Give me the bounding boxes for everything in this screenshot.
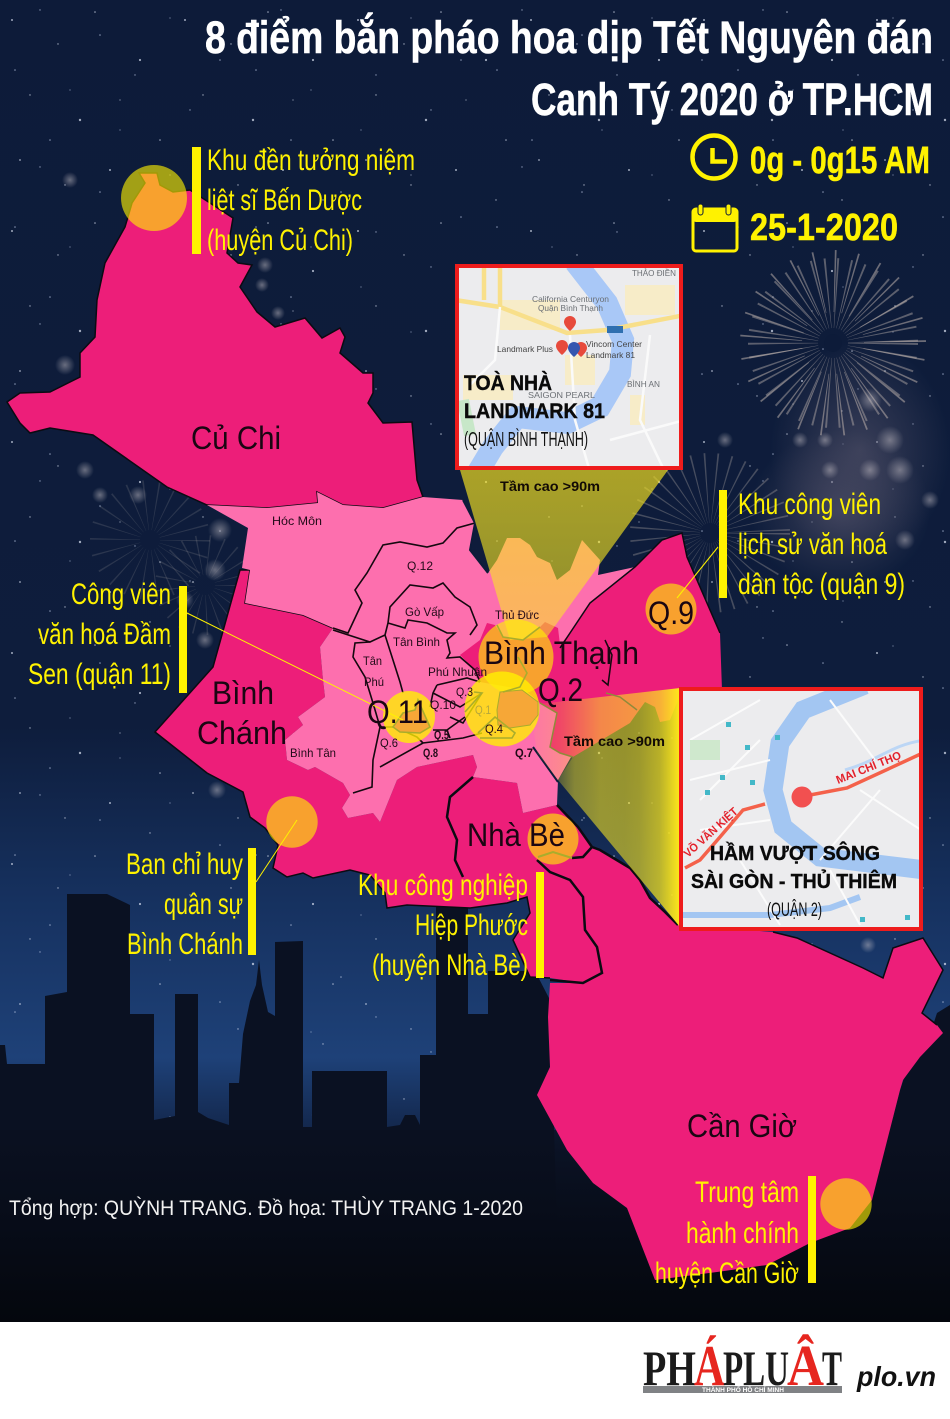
time and date xyxy=(692,136,930,251)
map labels: small: Q.10 xyxy=(430,698,456,712)
panel: Landmark 81 map: THẢO ĐIỀN xyxy=(632,267,676,278)
panel: Landmark 81 map: California Centuryon xyxy=(532,294,609,304)
districts: Bình Thạnh, Q.2 and Q.9 xyxy=(460,533,722,757)
map labels: small: Q.7 xyxy=(515,746,533,760)
panel: Landmark 81 map: BÌNH AN xyxy=(627,379,660,389)
icon: clock xyxy=(692,136,736,178)
map labels: small: Thủ Đức xyxy=(495,608,539,622)
inner districts: light pink area xyxy=(207,492,635,822)
callout: Cần Giờ: hành chính xyxy=(686,1217,799,1250)
city skyline silhouette xyxy=(0,894,950,1322)
map labels: small: Q.12 xyxy=(407,559,433,573)
logo: Pháp Luật: THÀNH PHỐ HỒ CHÍ MINH xyxy=(702,1386,784,1394)
callout: Hiệp Phước: Khu công nghiệp xyxy=(358,869,528,902)
map labels: small: Tân Bình xyxy=(393,635,440,649)
cone shading over night sky xyxy=(558,700,678,925)
map pins xyxy=(556,316,587,357)
callout: Bến Dược: Khu đền tưởng niệm xyxy=(207,144,415,177)
title xyxy=(205,12,933,125)
cone: river tunnel box to map xyxy=(530,688,680,927)
panel: Landmark 81 map: SAIGON PEARL xyxy=(528,390,595,400)
callout: quận 9 xyxy=(719,488,905,601)
callout: Bến Dược: (huyện Củ Chi) xyxy=(207,224,353,257)
district: Bình Chánh and Nhà Bè xyxy=(155,570,602,983)
map labels: small: Phú xyxy=(364,675,384,689)
callout: Bình Chánh: Ban chỉ huy xyxy=(126,848,243,881)
map labels: small: Q.5 xyxy=(434,728,449,742)
callout: quận 9: dân tộc (quận 9) xyxy=(738,568,905,601)
panel: river tunnel map: SÀI GÒN - THỦ THIÊM xyxy=(691,869,897,893)
map labels: small: Gò Vấp xyxy=(405,605,444,619)
outline: Cần Giờ coast xyxy=(773,932,943,1025)
logo: Pháp Luật: Ậ xyxy=(787,1333,824,1398)
map labels: small xyxy=(272,514,539,760)
boundary of Q.2 inside cone xyxy=(540,693,637,757)
callout: Đầm Sen: văn hoá Đầm xyxy=(38,618,171,651)
marker: Cần Giờ xyxy=(820,1178,872,1230)
map of Ho Chi Minh City xyxy=(7,173,943,1280)
map labels: small: Q.3 xyxy=(456,685,473,699)
date text: 25-1-2020 xyxy=(750,207,898,249)
callout: Bến Dược xyxy=(192,144,415,257)
map labels: large: Q.2 xyxy=(538,672,583,708)
height label: Landmark 81: Tầm cao >90m xyxy=(500,478,600,494)
marker: Bình Thạnh xyxy=(478,620,554,694)
logo: Pháp Luật: Á xyxy=(694,1333,725,1398)
panel: river tunnel map: HẦM VƯỢT SÔNG xyxy=(710,841,880,865)
marker: Đầm Sen xyxy=(383,691,435,743)
panel: Landmark 81 map: (QUẬN BÌNH THẠNH) xyxy=(464,428,588,451)
map labels: small: Bình Tân xyxy=(290,746,336,760)
map labels: small: Phú Nhuận xyxy=(428,665,487,679)
logo: Pháp Luật: PH xyxy=(643,1340,696,1396)
panel: Landmark 81 map: LANDMARK 81 xyxy=(464,400,605,423)
icon: calendar xyxy=(693,204,737,251)
map labels: large: Q.9 xyxy=(648,595,694,631)
marker: quận 9 xyxy=(646,584,696,634)
panel: river tunnel map xyxy=(681,685,925,929)
map labels: large: Chánh xyxy=(197,715,287,751)
map labels: small: Hóc Môn xyxy=(272,514,322,528)
panel: Landmark 81 map xyxy=(455,262,685,472)
callout: Bình Chánh: Bình Chánh xyxy=(127,928,243,961)
cone: Landmark 81 box to map xyxy=(460,470,668,640)
callout: Bình Chánh xyxy=(126,848,256,961)
map labels: small: Q.1 xyxy=(475,703,491,717)
panel: Landmark 81 map: Landmark 81 xyxy=(586,350,635,360)
panel: Landmark 81 map: TOÀ NHÀ xyxy=(464,372,552,395)
map labels: large: Nhà Bè xyxy=(467,817,565,853)
height label: river tunnel: Tầm cao >90m xyxy=(564,733,665,749)
outline: Q.2 and Q.9 xyxy=(560,533,720,648)
callout: Hiệp Phước: Hiệp Phước xyxy=(415,909,528,942)
credit line: Tổng hợp: QUỲNH TRANG. Đồ họa: THÙY TRANG 1-2020 xyxy=(9,1197,523,1220)
map labels: large: Q.11 xyxy=(367,694,428,730)
footer band xyxy=(0,1322,950,1419)
marker: Nhà Bè xyxy=(528,814,578,864)
map labels: small: Tân xyxy=(363,654,382,668)
district boundaries xyxy=(333,523,482,793)
panel: Landmark 81 map: Vincom Center xyxy=(586,339,642,349)
stars and fireworks xyxy=(0,0,950,1130)
map labels: small: Q.8 xyxy=(423,746,438,760)
callout: Hiệp Phước: (huyện Nhà Bè) xyxy=(372,949,528,982)
callout: Đầm Sen: Sen (quận 11) xyxy=(28,658,171,691)
marker: Thủ Thiêm xyxy=(464,672,540,746)
callout: Đầm Sen: Công viên xyxy=(71,578,171,611)
district: Cần Giờ xyxy=(537,847,943,1280)
callout: Cần Giờ: huyện Cần Giờ xyxy=(655,1257,799,1290)
callout: Đầm Sen xyxy=(28,578,187,693)
callout: Hiệp Phước xyxy=(358,869,544,982)
callout: Cần Giờ xyxy=(655,1176,816,1290)
panel: Landmark 81 map: Quận Bình Thạnh xyxy=(538,303,603,313)
logo: Pháp Luật xyxy=(640,1333,845,1405)
marker: Bình Chánh xyxy=(266,796,318,848)
map labels: small: Q.4 xyxy=(485,722,503,736)
inner highlight shapes xyxy=(393,625,572,858)
panel: river tunnel map: VÕ VĂN KIỆT xyxy=(681,805,741,860)
map labels: large xyxy=(191,420,797,1144)
callout: Bến Dược: liệt sĩ Bến Dược xyxy=(207,184,362,217)
leader lines xyxy=(187,547,718,882)
map labels: large: Cần Giờ xyxy=(687,1108,797,1144)
site name: plo.vn xyxy=(856,1361,936,1392)
marker: Bến Dược xyxy=(121,165,187,231)
panel: Landmark 81 map: Landmark Plus xyxy=(497,344,553,354)
ground fog xyxy=(0,1130,950,1322)
outline: Bình Chánh and Nhà Bè xyxy=(155,570,550,978)
map labels: large: Bình Thạnh xyxy=(484,635,639,671)
callout: Bình Chánh: quân sự xyxy=(164,888,243,921)
map labels: small: Q.6 xyxy=(380,736,398,750)
district: Củ Chi xyxy=(7,173,423,508)
map labels: large: Củ Chi xyxy=(191,420,281,456)
map labels: large: Bình xyxy=(212,675,274,711)
rivers around Nhà Bè and Cần Giờ xyxy=(447,777,678,983)
logo: Pháp Luật: T xyxy=(822,1340,842,1396)
logo: Pháp Luật: PLU xyxy=(723,1340,789,1396)
callout: Cần Giờ: Trung tâm xyxy=(695,1176,799,1209)
panel: river tunnel map: (QUẬN 2) xyxy=(767,899,822,921)
river: Sài Gòn xyxy=(463,500,558,782)
highlight circles xyxy=(121,165,872,1230)
callout: quận 9: lịch sử văn hoá xyxy=(738,528,887,561)
panel: river tunnel map: MAI CHÍ THỌ xyxy=(834,749,903,787)
callout: quận 9: Khu công viên xyxy=(738,488,881,521)
